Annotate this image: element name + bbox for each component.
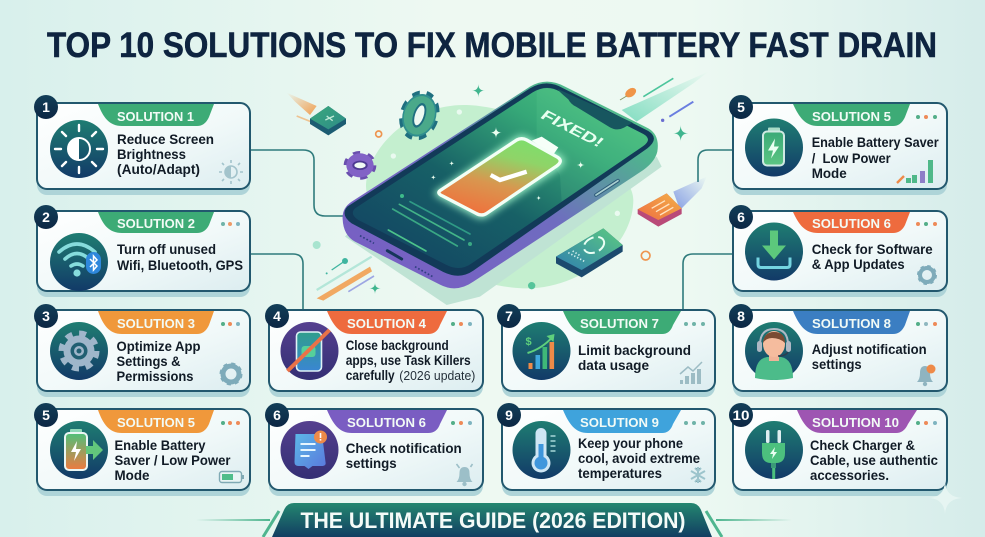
text: limit background data bbox=[578, 342, 691, 373]
text: enable battery saver bbox=[114, 437, 231, 483]
icon: crossed out phone bbox=[280, 322, 338, 380]
tab: solution 5: SOLUTION 5 bbox=[812, 109, 891, 124]
text: enable battery saver: Mode bbox=[812, 165, 847, 181]
card 2: turn off unused radios bbox=[34, 205, 250, 297]
card 1: reduce screen brightness bbox=[34, 95, 250, 195]
text: reduce screen brightness: Brightness bbox=[117, 146, 186, 162]
tab: solution 4 bbox=[327, 311, 447, 334]
badge 9 bbox=[497, 403, 521, 427]
text: check for software: Check for Software bbox=[812, 241, 933, 257]
badge 1: 1 bbox=[42, 99, 50, 115]
icon: small snowflake bbox=[691, 467, 705, 483]
text: enable battery saver bbox=[812, 134, 939, 181]
tab: solution 10 bbox=[797, 410, 917, 433]
tab: solution 6: SOLUTION 6 bbox=[812, 216, 891, 231]
badge 7: 7 bbox=[505, 308, 513, 324]
tab: solution 7: SOLUTION 7 bbox=[580, 316, 659, 331]
icon: small gear bbox=[222, 365, 240, 383]
badge 5 bbox=[34, 403, 58, 427]
card 5 right: enable battery saver bbox=[729, 95, 947, 195]
motion streaks: upper right bbox=[620, 72, 708, 122]
text: close background apps: carefully bbox=[346, 367, 395, 383]
card 10: check charger and cable bbox=[729, 403, 947, 496]
text: keep your phone cool bbox=[578, 435, 700, 481]
status dots bbox=[451, 421, 472, 425]
text: optimize app settings: Optimize App bbox=[116, 338, 200, 354]
text: turn off unused: Turn off unused bbox=[117, 241, 216, 257]
badge 10 bbox=[729, 403, 753, 427]
status dots bbox=[451, 322, 472, 326]
tab: solution 5 bbox=[793, 104, 910, 126]
text: keep your phone cool: cool, avoid extreme bbox=[578, 450, 700, 466]
text: close background apps: (2026 update) bbox=[399, 368, 475, 383]
badge 2: 2 bbox=[42, 209, 50, 225]
text: check charger and cable bbox=[810, 437, 938, 483]
text: close background apps: apps, use Task Killers bbox=[346, 352, 471, 368]
card 6 right: software updates bbox=[729, 205, 947, 297]
tab: solution 4: SOLUTION 4 bbox=[347, 316, 427, 331]
badge 9: 9 bbox=[505, 407, 513, 423]
text: reduce screen brightness: Reduce Screen bbox=[117, 131, 214, 147]
tab: solution 2 bbox=[98, 212, 214, 233]
icon: small sun bbox=[219, 160, 243, 184]
badge 6 bbox=[265, 403, 289, 427]
text: close background apps bbox=[346, 337, 475, 383]
icon: small trend chart bbox=[680, 362, 702, 384]
chip: lower blue bbox=[556, 228, 623, 277]
tab: solution 8: SOLUTION 8 bbox=[812, 316, 891, 331]
text: check notification settings: Check notification bbox=[346, 440, 462, 456]
text: reduce screen brightness: (Auto/Adapt) bbox=[117, 161, 200, 177]
icon: small gear bbox=[919, 267, 935, 283]
corner sparkle bbox=[929, 482, 962, 514]
badge 1 bbox=[34, 95, 58, 119]
icon: download bbox=[745, 222, 803, 280]
gear: purple bbox=[346, 153, 374, 177]
text: enable battery saver: Enable Battery Saver bbox=[812, 134, 939, 150]
motion streaks: lower left bbox=[317, 257, 374, 301]
card 8: adjust notification settings bbox=[729, 304, 947, 397]
tab: solution 6 bbox=[327, 410, 447, 433]
status dots bbox=[916, 115, 937, 119]
text: keep your phone cool: Keep your phone bbox=[578, 435, 683, 451]
tab: solution 7 bbox=[563, 311, 681, 334]
badge 4 bbox=[265, 304, 289, 328]
icon: rising data bars: $ bbox=[526, 336, 532, 348]
badge 5: 5 bbox=[737, 99, 745, 115]
text: turn off unused bbox=[117, 241, 243, 273]
text: check notification settings: settings bbox=[346, 455, 397, 471]
icon: brightness sun bbox=[50, 120, 108, 178]
badge 6: 6 bbox=[737, 209, 745, 225]
tab: solution 9 bbox=[563, 410, 681, 433]
phone hardware details bbox=[596, 181, 618, 195]
tab: solution 6: SOLUTION 6 bbox=[347, 415, 426, 430]
text: enable battery saver: Mode bbox=[114, 467, 150, 483]
status dots bbox=[684, 421, 705, 425]
tab: solution 2: SOLUTION 2 bbox=[117, 216, 195, 231]
icon: small battery bbox=[220, 472, 244, 482]
icon: small ringing bell bbox=[456, 464, 472, 486]
tab: solution 1 bbox=[98, 104, 214, 126]
text: enable battery saver: Saver / Low Power bbox=[114, 452, 231, 468]
text: check charger and cable: Cable, use authentic bbox=[810, 452, 938, 468]
status dots bbox=[916, 421, 937, 425]
card 6 left: check notification settings bbox=[265, 403, 483, 496]
text: check charger and cable: accessories. bbox=[810, 467, 889, 483]
badge 3: 3 bbox=[42, 308, 50, 324]
text: check notification settings bbox=[346, 440, 462, 471]
chip: top left bbox=[287, 93, 346, 135]
text: optimize app settings: Permissions bbox=[116, 368, 194, 384]
badge 10: 10 bbox=[732, 407, 750, 423]
status dots bbox=[916, 322, 937, 326]
icon: plug bbox=[745, 421, 803, 479]
tab: solution 1: SOLUTION 1 bbox=[117, 109, 194, 124]
text: check for software: & App Updates bbox=[812, 256, 905, 272]
status dots bbox=[916, 222, 937, 226]
icon: rising data bars bbox=[512, 322, 570, 380]
battery bbox=[439, 137, 560, 215]
tab: solution 8 bbox=[793, 311, 910, 334]
tab: solution 10: SOLUTION 10 bbox=[812, 415, 899, 430]
card 4: close background apps bbox=[265, 304, 483, 397]
phone shadow bbox=[345, 157, 662, 305]
tab: solution 5: SOLUTION 5 bbox=[117, 415, 195, 430]
hero illustration: phone with fixed battery bbox=[287, 72, 708, 305]
text: limit background data: Limit background bbox=[578, 342, 691, 358]
text: optimize app settings: Settings & bbox=[116, 353, 180, 369]
card 9: keep your phone cool bbox=[497, 403, 715, 496]
card 5 left: enable battery saver bbox=[34, 403, 250, 496]
text: adjust notification: settings bbox=[812, 356, 862, 372]
badge 6 bbox=[729, 205, 753, 229]
tab: solution 3 bbox=[98, 311, 214, 334]
badge 7 bbox=[497, 304, 521, 328]
icon: support person with headset bbox=[745, 322, 803, 380]
tab: solution 9: SOLUTION 9 bbox=[580, 415, 659, 430]
text: reduce screen brightness bbox=[117, 131, 214, 177]
text: limit background data: data usage bbox=[578, 357, 649, 373]
icon: settings gear bbox=[50, 322, 108, 380]
icon: small bell with alert bbox=[917, 364, 936, 386]
badge 4: 4 bbox=[273, 308, 281, 324]
gear: teal bbox=[397, 89, 442, 141]
screen sparkles bbox=[431, 127, 585, 201]
fixed label: FIXED! bbox=[537, 108, 607, 151]
text: close background apps: Close background bbox=[346, 337, 449, 353]
card 3: optimize app settings bbox=[34, 304, 250, 397]
icon: notification bubble bbox=[280, 421, 338, 479]
icon: green battery bbox=[745, 118, 803, 176]
battery glow bbox=[434, 135, 565, 219]
text: adjust notification: Adjust notification bbox=[812, 341, 927, 357]
connector lines bbox=[250, 150, 733, 310]
screen lines bbox=[388, 202, 470, 251]
green backdrop blob bbox=[366, 105, 633, 288]
icon: thermometer bbox=[512, 421, 570, 479]
status dots bbox=[221, 421, 240, 425]
text: turn off unused: Wifi, Bluetooth, GPS bbox=[117, 257, 243, 273]
badge 8 bbox=[729, 304, 753, 328]
status dots bbox=[221, 222, 240, 226]
text: enable battery saver: Enable Battery bbox=[114, 437, 206, 453]
icon: small signal bars bbox=[897, 160, 933, 183]
card 7: limit background data bbox=[497, 304, 715, 397]
text: optimize app settings bbox=[116, 338, 200, 384]
icon: wifi and bluetooth bbox=[50, 233, 108, 291]
phone bbox=[343, 82, 658, 288]
text: enable battery saver: / Low Power bbox=[812, 150, 891, 166]
text: check for software bbox=[812, 241, 933, 272]
badge 8: 8 bbox=[737, 308, 745, 324]
text: adjust notification bbox=[812, 341, 927, 372]
badge 5: 5 bbox=[42, 407, 50, 423]
text: check charger and cable: Check Charger & bbox=[810, 437, 915, 453]
status dots bbox=[684, 322, 705, 326]
icon: battery with arrow bbox=[50, 421, 108, 479]
footer banner bbox=[196, 503, 792, 537]
decorative sparkles and rings bbox=[313, 84, 688, 294]
footer banner: THE ULTIMATE GUIDE (2026 EDITION) bbox=[300, 508, 686, 533]
tab: solution 5 bbox=[98, 410, 214, 433]
badge 2 bbox=[34, 205, 58, 229]
chip: right orange bbox=[638, 177, 707, 227]
badge 6: 6 bbox=[273, 407, 281, 423]
tab: solution 3: SOLUTION 3 bbox=[117, 316, 195, 331]
tab: solution 6 bbox=[793, 212, 910, 233]
badge 3 bbox=[34, 304, 58, 328]
text: keep your phone cool: temperatures bbox=[578, 465, 662, 481]
badge 5 bbox=[729, 95, 753, 119]
status dots bbox=[221, 322, 240, 326]
